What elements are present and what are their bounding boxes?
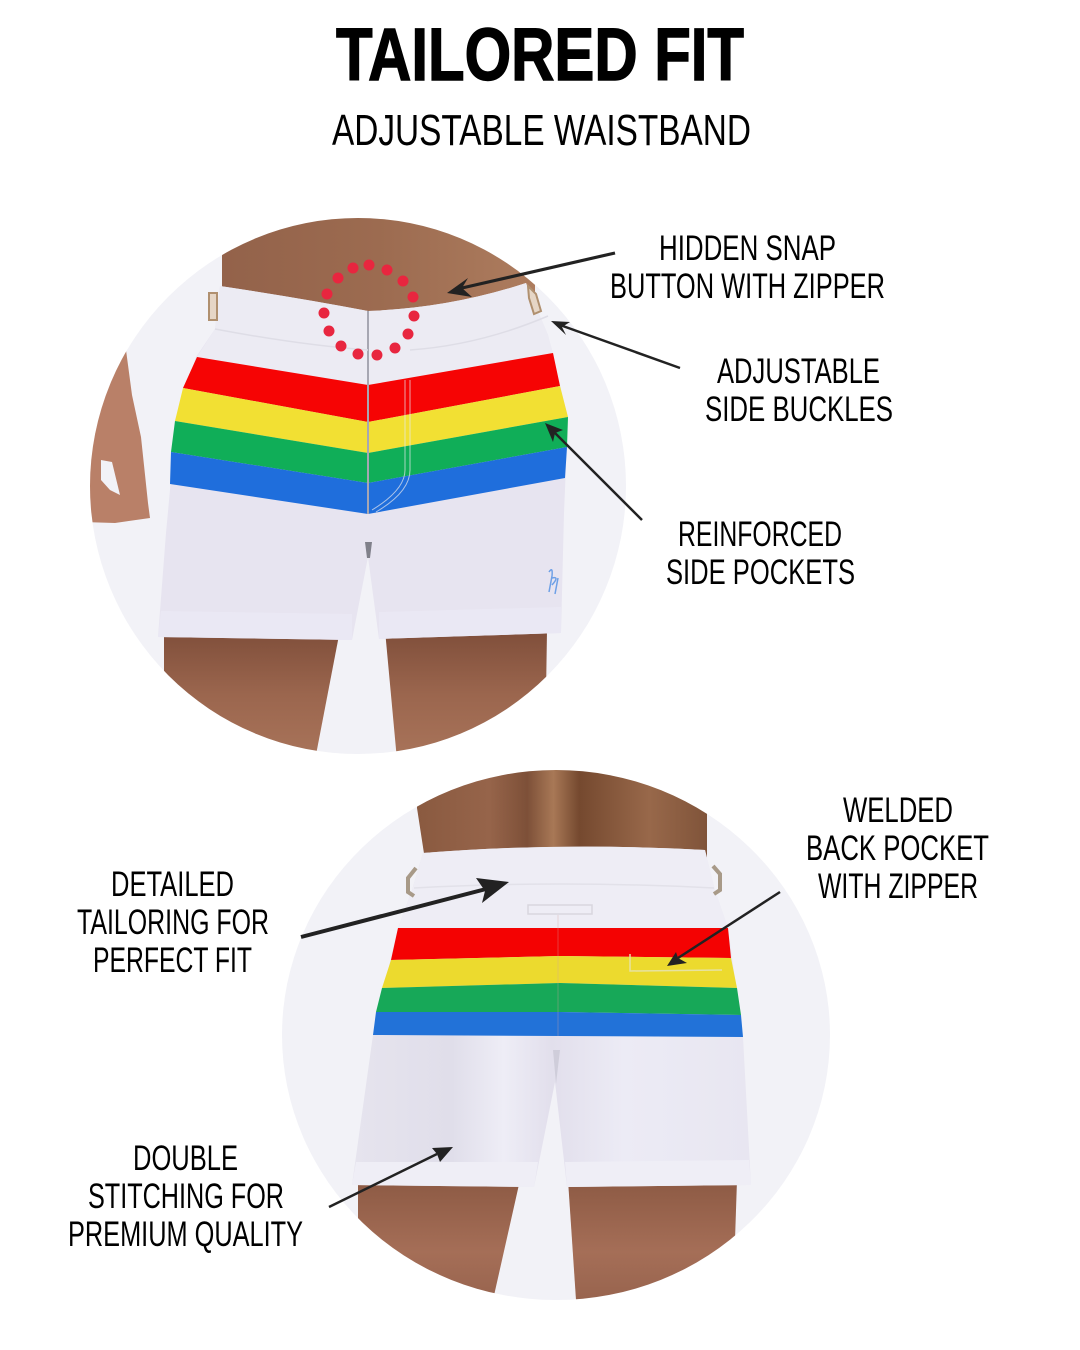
label: adjustable side buckles: SIDE BUCKLES [705,390,893,429]
label: welded back pocket: WELDED [843,791,953,830]
hem [164,633,547,640]
panel: front view photo [80,210,640,760]
welded pocket outline [630,954,722,971]
circle background [282,807,830,1300]
label: welded back pocket [806,791,989,906]
crotch shadow [365,542,372,558]
subtitle: ADJUSTABLE WAISTBAND [332,106,751,155]
label: detailed tailoring [77,865,269,980]
label: reinforced side pockets [666,515,855,592]
panel: back view photo [280,765,840,1305]
side buckles [408,868,416,896]
arrow: hidden snap [447,253,615,297]
label: double stitching: PREMIUM QUALITY [68,1215,303,1254]
arrow: back pocket [667,892,780,966]
label: welded back pocket: WITH ZIPPER [818,867,978,906]
label: hidden snap button: BUTTON WITH ZIPPER [610,267,885,306]
logo script [549,570,558,594]
label: reinforced side pockets: SIDE POCKETS [666,553,855,592]
legs [358,1185,518,1294]
label: detailed tailoring: TAILORING FOR [77,903,269,942]
label: detailed tailoring: DETAILED [111,865,234,904]
side buckles [209,293,217,320]
fly and stitching [367,311,369,514]
circle background [92,256,626,754]
label: adjustable side buckles: ADJUSTABLE [717,352,880,391]
label: adjustable side buckles [705,352,893,429]
red dotted circle [318,260,420,360]
back shorts [352,847,751,1187]
arm and hand [90,351,150,523]
label: hidden snap button: HIDDEN SNAP [659,229,836,268]
label: welded back pocket: BACK POCKET [806,829,989,868]
hem [352,1162,737,1187]
arrow: tailoring [301,878,509,937]
arrow: side buckles [551,321,680,368]
label: hidden snap button [610,229,885,306]
title: TAILORED FIT [336,13,744,96]
label: double stitching [68,1139,303,1254]
label: detailed tailoring: PERFECT FIT [93,941,252,980]
label: double stitching: DOUBLE [133,1139,238,1178]
torso skin [222,218,535,311]
label: reinforced side pockets: REINFORCED [678,515,842,554]
arrow: side pockets [545,423,642,520]
arrow: stitching [329,1147,453,1207]
legs [164,637,338,751]
crotch shadow [553,1050,560,1084]
front shorts [158,283,568,640]
back skin [417,765,707,860]
label: double stitching: STITCHING FOR [88,1177,284,1216]
